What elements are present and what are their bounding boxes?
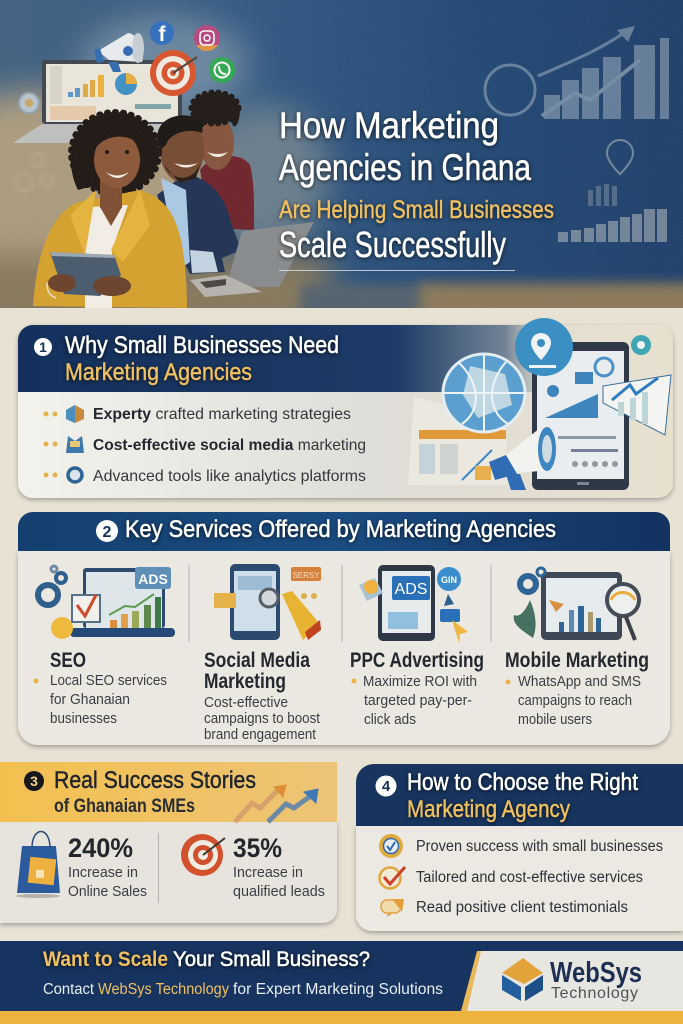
footer call to action [0,941,683,1024]
social text: brand engagement [204,726,317,743]
PPC illustration [359,565,468,643]
divider [158,833,159,903]
heading: Marketing Agency [407,796,570,823]
icon: growth arrows [235,785,318,822]
logo: Technology [551,985,638,1002]
logo accent [461,951,481,1011]
heading: Real Success Stories [54,767,256,794]
list item: analytics tools: Advanced tools like analytics platforms [93,468,366,485]
PPC illustration: GIN [441,575,457,585]
globe [443,354,525,432]
title: Scale Successfully [279,224,506,265]
SEO text: businesses [50,710,117,727]
icon: location pin [19,93,39,113]
list item: tailored services: Tailored and cost-effective services [416,869,643,886]
social illustration: SERSY [292,571,320,580]
PPC text: click ads [364,711,416,728]
hero background chart [485,26,669,119]
heading: How to Choose the Right [407,769,638,796]
stat: 35 percent: Increase in [233,864,303,881]
title: Are Helping Small Businesses [279,196,554,224]
hero banner [0,0,683,335]
list item: proven success: Proven success with small businesses [416,838,663,855]
front laptop [190,222,314,297]
stat: 35 percent: 35% [233,833,282,863]
service: mobile marketing [505,568,649,728]
heading: Your Small Business? [173,948,370,971]
panel: how to choose [356,764,683,931]
social text: Cost-effective [204,694,288,711]
gold strip [0,1011,683,1024]
title: Agencies in Ghana [279,147,531,188]
small pin circle [631,335,651,355]
contact line: WebSys Technology [98,981,229,998]
social heading [204,649,310,693]
heading number 2 [96,520,118,542]
mobile text [518,673,641,728]
SEO bullet [34,678,38,684]
panel: key services [18,512,670,745]
heading [54,767,256,817]
stat: 240 percent: Increase in [68,864,138,881]
social text: campaigns to boost [204,710,321,727]
hero lower chart [558,140,667,242]
stat: 240 percent: 240% [68,833,133,863]
panel header [18,325,560,392]
panel: real success stories [0,762,337,923]
list item: social media: Cost-effective social media marketing [93,437,366,454]
panel header [356,764,683,826]
person: back woman [191,92,254,230]
PPC text: targeted pay-per- [364,692,472,709]
stat: 240 percent [16,832,147,900]
service: PPC advertising [350,565,484,728]
back laptop dashboard [13,60,190,143]
mobile text: mobile users [518,711,592,728]
SEO text [50,672,167,727]
SEO illustration: ADS [138,571,168,587]
social text [204,694,321,743]
heading: Why Small Businesses Need [65,332,339,359]
mobile text: campaigns to reach [518,692,632,709]
SEO text: for Ghanaian [50,691,130,708]
icon: facebook: f [158,23,166,46]
contact line: for Expert Marketing Solutions [233,981,443,998]
icon: facebook [150,21,174,46]
logo panel [463,951,683,1011]
icon: whatsapp [209,57,235,83]
contact line [43,981,443,998]
PPC bullet [352,678,356,684]
stat: 35 percent: qualified leads [233,883,325,900]
PPC illustration: ADS [395,581,427,598]
stat: 35 percent [181,833,325,900]
panel header [18,512,670,551]
phone [532,342,629,490]
social heading: Marketing [204,670,286,693]
title [279,105,554,265]
mobile bullet [506,680,510,684]
icon: target [150,50,197,96]
SEO text: Local SEO services [50,672,167,689]
title: How Marketing [279,105,499,146]
location badge [515,318,573,376]
icon: shopping bag [16,832,60,898]
logo [502,957,642,1002]
icon: instagram [194,25,220,51]
heading: Marketing Agencies [65,359,252,386]
mobile illustration [514,568,639,640]
stat: 240 percent: Online Sales [68,883,147,900]
SEO illustration [38,566,175,639]
PPC text [363,673,477,728]
icon: megaphone [94,33,144,72]
icon: cube [502,958,543,1001]
contact line: Contact [43,981,95,998]
person: man [157,115,241,274]
illustration: marketing devices [408,318,671,490]
chart card [603,375,671,435]
heading number 3 [24,771,44,791]
document [408,397,507,485]
list item: tailored services [380,867,643,888]
PPC text: Maximize ROI with [363,673,477,690]
hero grain [0,0,683,308]
heading [407,769,638,823]
social illustration [214,564,321,640]
logo: WebSys [550,957,642,989]
heading number 1 [34,338,52,356]
heading: Want to Scale [43,948,168,971]
heading [43,948,370,971]
heading number 2: 2 [103,524,112,541]
heading: Key Services Offered by Marketing Agencies [125,516,556,543]
heading number 4 [376,776,396,796]
heading number 3: 3 [30,773,38,789]
heading number 1: 1 [39,339,47,355]
mobile text: WhatsApp and SMS [518,673,641,690]
SEO heading: SEO [50,649,86,672]
icon: target [181,834,225,876]
panel: why small businesses need agencies [18,318,673,498]
heading number 4: 4 [382,778,391,795]
mobile heading: Mobile Marketing [505,649,649,672]
panel header [0,762,337,822]
service: social media marketing [204,564,321,743]
tablet and hands [47,252,131,298]
heading: of Ghanaian SMEs [54,796,195,817]
heading [65,332,339,386]
service: SEO [34,566,175,727]
list item: testimonials: Read positive client testimonials [416,899,628,916]
social heading: Social Media [204,649,310,672]
list item: proven success [379,834,663,858]
person: front woman [33,112,187,308]
divider [189,565,491,642]
megaphone [489,427,556,490]
PPC heading: PPC Advertising [350,649,484,672]
icon: gears [15,154,53,191]
list item: expert strategies: Experty crafted marketing strategies [93,406,351,423]
